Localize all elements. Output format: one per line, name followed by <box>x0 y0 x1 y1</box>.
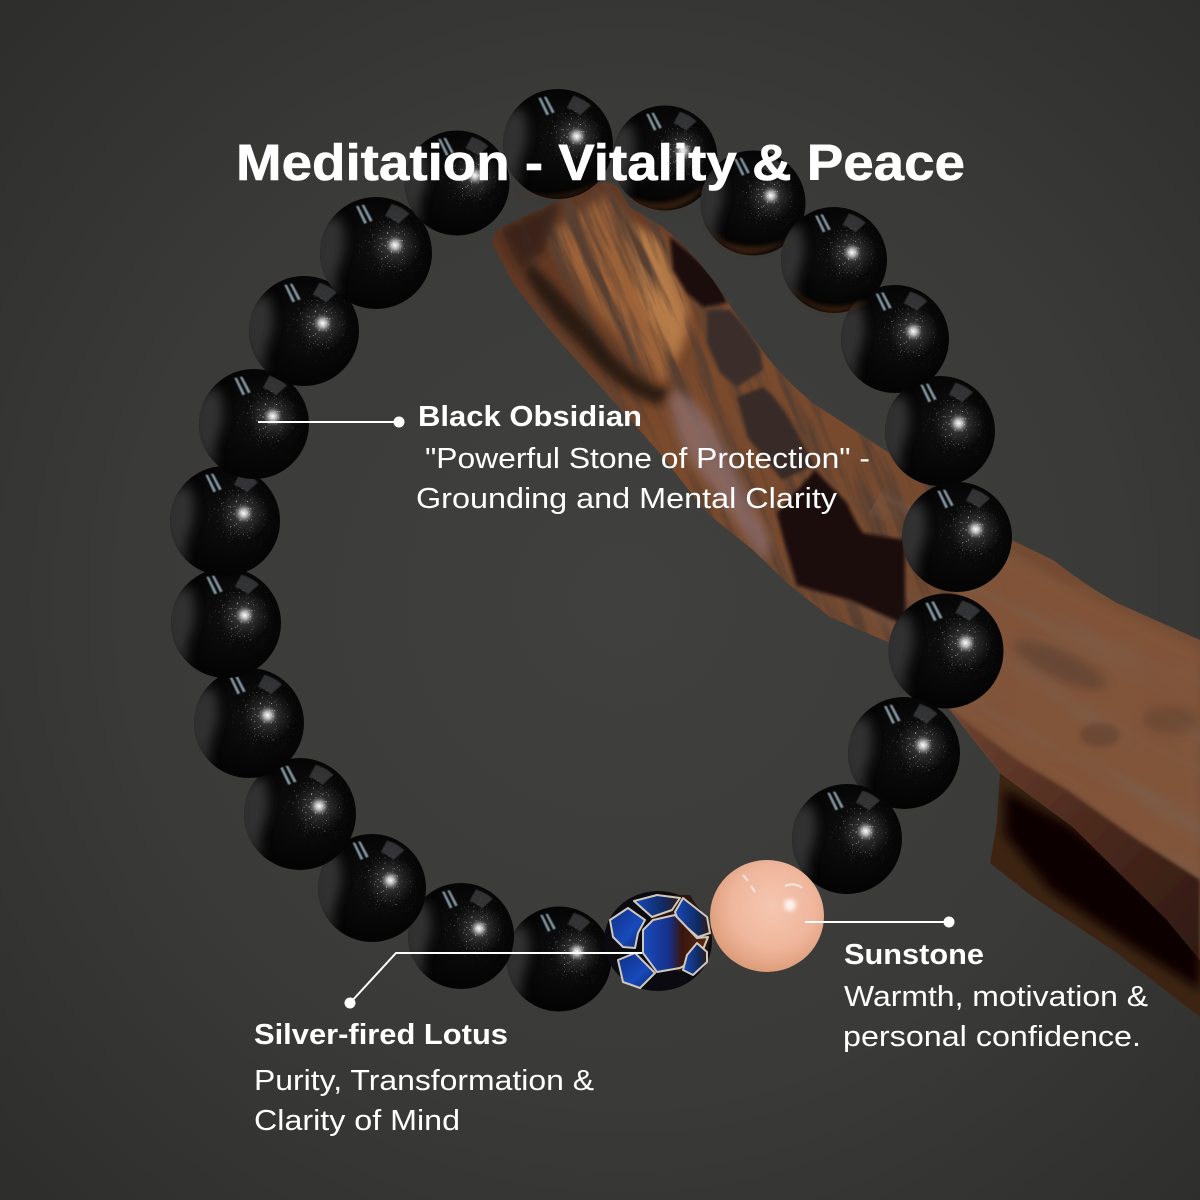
title: Meditation - Vitality & Peace <box>236 134 965 191</box>
wood lit top face, upper <box>545 195 690 385</box>
callout: sunstone <box>805 916 1148 1053</box>
connector line <box>344 953 642 1008</box>
label description: Purity, Transformation & <box>254 1065 594 1097</box>
wood mauve patch <box>670 390 770 565</box>
wood main body <box>492 182 1200 960</box>
wood shadowed underside <box>990 773 1200 1017</box>
label description <box>416 443 870 515</box>
label description: personal confidence. <box>843 1021 1141 1053</box>
wood lit top face, right <box>956 558 1197 865</box>
black obsidian beads <box>161 89 1012 1012</box>
label description: Clarity of Mind <box>254 1105 460 1137</box>
wood dark groove <box>525 262 670 405</box>
label heading: Sunstone <box>844 939 984 971</box>
connector line <box>258 416 404 428</box>
warm wood reflection on beads <box>515 180 870 313</box>
wood front face, right <box>950 710 1200 970</box>
label description: Warmth, motivation & <box>844 981 1148 1013</box>
infographic canvas <box>170 89 1200 1136</box>
label description: Grounding and Mental Clarity <box>416 483 838 515</box>
wood grain, upper <box>499 182 954 642</box>
callout: silver-fired lotus <box>254 953 642 1137</box>
label description: "Powerful Stone of Protection" - <box>425 443 870 475</box>
silver-fired lotus bead <box>604 891 712 991</box>
label description <box>843 981 1148 1053</box>
connector line <box>805 916 954 928</box>
bead shadows on wood <box>670 237 905 625</box>
wood branch <box>492 182 1200 1017</box>
label heading: Silver-fired Lotus <box>254 1019 508 1051</box>
bracelet <box>161 89 1012 1012</box>
label heading: Black Obsidian <box>418 401 642 433</box>
sunstone bead <box>710 860 824 972</box>
label description <box>254 1065 594 1137</box>
callout: black obsidian <box>258 401 870 515</box>
